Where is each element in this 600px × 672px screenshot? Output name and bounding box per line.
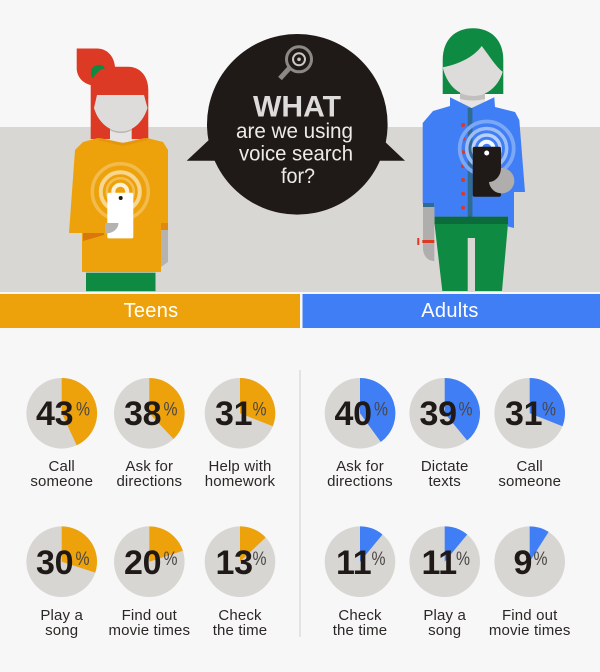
pie: 40% ask for directions: 40: [334, 395, 372, 433]
pie: 38% ask for directions: directions: [116, 473, 182, 490]
bubble title text: voice search: [239, 142, 353, 166]
pie: 43% call someone: 43: [36, 395, 73, 433]
pie: 11% play a song: %: [456, 549, 470, 570]
adult neck: [460, 90, 485, 108]
pie: 39% dictate texts: [409, 378, 480, 490]
signal rings on teen: [92, 164, 148, 220]
signal rings on adult: [460, 122, 514, 176]
pie: 13% check the time: [205, 526, 275, 639]
pie: 13% check the time: Check: [218, 607, 262, 624]
adult shirt placket: [468, 108, 472, 217]
pie: 20% find out movie times: 20: [124, 544, 161, 582]
pie: 11% play a song: [409, 526, 480, 639]
pie: 30% play a song: 30: [36, 544, 73, 582]
pie: 40% ask for directions: %: [374, 400, 388, 420]
pie: 31% help with homework: Help with: [208, 458, 272, 475]
pie: 31% help with homework: homework: [205, 473, 276, 490]
header: Adults: [302, 294, 600, 328]
pie: 9% find out movie times: movie times: [489, 622, 571, 639]
pie: 38% ask for directions: 38: [124, 395, 161, 433]
illustration: adult with phone: [417, 28, 525, 291]
panel: teens charts: [26, 378, 276, 639]
pie: 13% check the time: the time: [213, 622, 267, 639]
pie: 9% find out movie times: [489, 526, 571, 639]
header: Teens: Teens: [124, 300, 178, 322]
adult phone: [473, 147, 501, 197]
teen collar shadow: [97, 138, 148, 146]
teen right arm: [161, 230, 168, 267]
adult hair: [443, 28, 503, 94]
panel: adults charts: [325, 378, 571, 639]
pie: 31% help with homework: %: [252, 400, 267, 420]
header: Adults: Adults: [421, 300, 479, 322]
pie: 43% call someone: [26, 378, 97, 490]
pie: 20% find out movie times: [108, 526, 190, 639]
adult shirt buttons: [461, 123, 465, 210]
pie: 11% check the time: Check: [338, 607, 382, 624]
adult left arm and watch: [417, 203, 434, 261]
adult face: [443, 46, 503, 96]
pie: 39% dictate texts: Dictate: [421, 458, 469, 475]
pie: 20% find out movie times: movie times: [108, 622, 190, 639]
pie: 40% ask for directions: directions: [327, 473, 393, 490]
pie: 39% dictate texts: 39: [420, 395, 457, 433]
pie: 30% play a song: Play a: [40, 607, 84, 624]
pie: 11% play a song: song: [428, 622, 461, 639]
bubble title text: are we using: [236, 119, 353, 143]
pie: 43% call someone: Call: [48, 458, 75, 475]
pie: 30% play a song: song: [45, 622, 78, 639]
teen phone: [107, 193, 133, 238]
bubble title text: WHAT: [253, 90, 341, 124]
pie: 11% check the time: %: [372, 549, 386, 570]
pie: 9% find out movie times: %: [534, 549, 548, 570]
pie: 30% play a song: %: [76, 549, 90, 570]
icon: magnifying glass: [280, 47, 312, 78]
teen neck: [110, 122, 132, 142]
pie: 40% ask for directions: [325, 378, 395, 490]
teen shirt: [69, 138, 168, 272]
pie: 31% call someone: Call: [516, 458, 543, 475]
speech bubble: [187, 34, 405, 215]
bubble title text: [236, 90, 353, 188]
teen face: [94, 95, 148, 132]
pie: 31% call someone: 31: [505, 395, 542, 433]
pie: 13% check the time: %: [252, 549, 267, 570]
adult trousers: [434, 224, 508, 291]
pie: 11% check the time: [325, 526, 395, 639]
pie: 31% call someone: someone: [498, 473, 561, 490]
pie: 31% help with homework: 31: [215, 395, 252, 433]
pie: 38% ask for directions: Ask for: [125, 458, 173, 475]
pie: 11% play a song: 11: [422, 544, 457, 582]
pie: 20% find out movie times: Find out: [122, 607, 178, 624]
teen sleeve shadow: [83, 233, 104, 241]
illustration: teen with phone: [69, 48, 168, 291]
pie: 20% find out movie times: %: [164, 549, 178, 570]
pie: 9% find out movie times: Find out: [502, 607, 558, 624]
adult shirt: [423, 97, 525, 228]
pie: 39% dictate texts: %: [458, 400, 473, 420]
pie: 43% call someone: someone: [30, 473, 93, 490]
pie: 38% ask for directions: %: [164, 400, 178, 420]
adult hand: [489, 168, 514, 193]
pie: 43% call someone: %: [76, 400, 90, 420]
adult belt: [434, 217, 508, 224]
teen hair and ponytail: [77, 48, 148, 139]
pie: 31% call someone: %: [542, 400, 556, 420]
pie: 40% ask for directions: Ask for: [336, 458, 384, 475]
pie: 13% check the time: 13: [216, 544, 253, 582]
pie: 31% call someone: [494, 378, 565, 490]
pie: 38% ask for directions: [114, 378, 185, 490]
pie: 9% find out movie times: 9: [514, 544, 532, 582]
pie: 30% play a song: [26, 526, 97, 639]
pie: 11% check the time: 11: [336, 544, 371, 582]
header: Teens: [0, 294, 300, 328]
teen hand: [105, 223, 118, 234]
pie: 31% help with homework: [205, 378, 276, 490]
pie: 11% check the time: the time: [333, 622, 387, 639]
pie: 11% play a song: Play a: [423, 607, 467, 624]
teen pants: [86, 273, 156, 291]
bubble title text: for?: [281, 164, 315, 188]
pie: 39% dictate texts: texts: [428, 473, 461, 490]
